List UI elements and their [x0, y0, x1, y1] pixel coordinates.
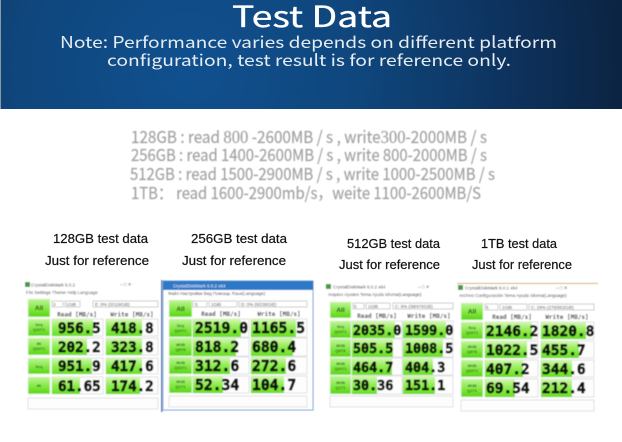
caption: 1TB	[472, 236, 572, 272]
speed specification list	[130, 124, 495, 204]
panel: 128GB benchmark window: E: 0% (0/119GiB)	[95, 302, 130, 307]
panel: 256GB benchmark window: Файл Настройки Вид Помощь Язык(Language)	[168, 290, 266, 296]
panel: 1TB benchmark window: C: 29% (275/953GiB)	[531, 305, 574, 310]
panel: 256GB benchmark window: 4KiB	[176, 360, 185, 365]
panel: 256GB benchmark window	[163, 281, 313, 410]
panel: 256GB benchmark window: 52.34	[195, 377, 239, 394]
panel: 128GB benchmark window: All	[35, 305, 43, 312]
panel: 128GB benchmark window: Write [MB/s]	[110, 312, 154, 318]
panel: 1TB benchmark window: Q8T8	[467, 349, 478, 354]
panel: 512GB benchmark window: 1599.0	[405, 324, 453, 339]
panel: 128GB benchmark window: Read [MB/s]	[57, 312, 97, 318]
panel: 128GB benchmark window: 4K	[36, 383, 42, 388]
panel: 128GB benchmark window: – □ ✕	[120, 282, 132, 287]
panel: 1TB benchmark window: 4KiB	[467, 383, 477, 388]
panel: 128GB benchmark window: 61.65	[58, 379, 101, 395]
panel: 128GB benchmark window: 1GiB	[66, 302, 76, 307]
panel: 1TB benchmark window: 455.7	[542, 343, 586, 359]
panel: 1TB benchmark window	[457, 283, 598, 412]
panel: 1TB benchmark window: 5	[486, 305, 489, 310]
panel: 1TB benchmark window: Q32T1	[466, 330, 479, 335]
panel: 512GB benchmark window: 30.36	[353, 379, 393, 394]
panel: 128GB benchmark window: 174.2	[111, 379, 154, 395]
panel: 128GB benchmark window: 323.8	[111, 340, 154, 356]
panel: 1TB benchmark window: Seq	[468, 325, 476, 330]
panel: 128GB benchmark window: CrystalDiskMark 5.0.2	[31, 282, 76, 288]
caption: 1TB: Just for reference	[472, 257, 572, 272]
panel: 128GB benchmark window: Seq	[35, 364, 43, 369]
panel: 256GB benchmark window: 312.6	[195, 358, 239, 375]
panel: 256GB benchmark window: Write [MB/s]	[257, 311, 301, 318]
panel: 512GB benchmark window: 2035.0	[353, 324, 401, 339]
panel: 512GB benchmark window: 1GiB	[368, 304, 378, 309]
panel: 256GB benchmark window: 818.2	[195, 339, 239, 356]
panel: 1TB benchmark window: 212.4	[542, 381, 586, 397]
caption: 128GB	[45, 231, 149, 268]
panel: 1TB benchmark window: 4KiB	[467, 344, 477, 349]
panel: 512GB benchmark window: Q32T1	[334, 366, 347, 371]
panel: 1TB benchmark window: Read [MB/s]	[492, 314, 532, 321]
caption: 1TB: 1TB test data	[481, 236, 558, 251]
panel: 256GB benchmark window: 272.6	[252, 358, 296, 375]
panel: 256GB benchmark window: Seq	[177, 323, 185, 328]
panel: 128GB benchmark window: 418.8	[111, 321, 154, 337]
panel: 512GB benchmark window: All	[336, 307, 345, 314]
panel: 1TB benchmark window: Write [MB/s]	[545, 314, 589, 321]
panel: 256GB benchmark window: 2519.0	[195, 320, 248, 337]
panel: 512GB benchmark window: Q8T8	[335, 348, 346, 353]
panel: 512GB benchmark window: 464.7	[353, 361, 393, 376]
panel: 256GB benchmark window: 1GiB	[211, 302, 221, 307]
panel: 512GB benchmark window: 505.5	[353, 342, 393, 357]
panel: 1TB benchmark window: 69.54	[486, 381, 530, 397]
speed specification list: 256GB : read 1400-2600MB / s , write 800-2000MB / s	[131, 142, 487, 166]
panel: 512GB benchmark window: CrystalDiskMark 6.0.2 x64	[333, 284, 386, 290]
caption: 512GB	[339, 236, 441, 272]
panel: 128GB benchmark window: Seq	[35, 322, 43, 327]
panel: 256GB benchmark window: D: 0% (0/238GiB)	[241, 302, 277, 307]
panel: 128GB benchmark window: Q32T1	[33, 346, 46, 351]
panel: 256GB benchmark window: All	[176, 306, 185, 313]
panel: 256GB benchmark window: 104.7	[252, 377, 296, 394]
panel: 1TB benchmark window: All	[468, 308, 476, 316]
panel: 512GB benchmark window: 1008.5	[405, 342, 453, 357]
caption: 128GB: 128GB test data	[53, 231, 149, 246]
panel: 256GB benchmark window: 5	[195, 302, 198, 307]
caption: 256GB	[182, 231, 288, 268]
panel: 1TB benchmark window: CrystalDiskMark 6.0.1 x64	[465, 286, 518, 290]
panel: 128GB benchmark window: 3	[53, 302, 56, 307]
panel: 256GB benchmark window: Q32T1	[174, 328, 187, 333]
panel: 512GB benchmark window: 404.3	[405, 361, 445, 376]
panel: 256GB benchmark window: 680.4	[252, 339, 296, 356]
caption: 512GB: 512GB test data	[347, 236, 441, 251]
panel: 512GB benchmark window: 5	[354, 304, 357, 309]
panel: 128GB benchmark window: Q32T1	[33, 327, 46, 332]
panel: 1TB benchmark window: 1820.8	[542, 324, 594, 340]
panel: 512GB benchmark window: 151.1	[405, 379, 445, 394]
panel: 256GB benchmark window: CrystalDiskMark 6.0.2 x64	[173, 284, 226, 288]
panel: 512GB benchmark window: Q32T1	[334, 329, 347, 334]
panel: 256GB benchmark window: Q8T8	[175, 347, 186, 352]
speed specification list: 512GB : read 1500-2900MB / s , write 1000-2500MB / s	[130, 161, 495, 185]
panel: 256GB benchmark window: Q1T1	[175, 384, 186, 389]
panel: 1TB benchmark window: 1022.5	[486, 343, 538, 359]
panel: 1TB benchmark window: Q32T1	[466, 368, 479, 373]
panel: 512GB benchmark window: Write [MB/s]	[407, 313, 451, 320]
panel: 512GB benchmark window: 4KiB	[336, 380, 345, 385]
panel: 128GB benchmark window: 417.6	[111, 359, 154, 375]
panel: 256GB benchmark window: 4KiB	[176, 342, 185, 347]
panel: 512GB benchmark window: 4KiB	[336, 343, 345, 348]
panel: 128GB benchmark window: 202.2	[58, 340, 101, 356]
caption: 512GB: Just for reference	[339, 257, 440, 272]
panel: 1TB benchmark window: Q1T1	[467, 388, 478, 393]
panel: 1TB benchmark window: 407.2	[486, 362, 530, 378]
panel: 256GB benchmark window: 1165.5	[252, 320, 305, 337]
panel: 512GB benchmark window: Seq	[337, 324, 345, 329]
panel: 1TB benchmark window: Archivo Configuración Tema Ayuda Idioma(Language)	[459, 293, 567, 298]
speed specification list: 1TB： read 1600-2900mb/s，weite 1100-2600MB/S	[131, 180, 481, 204]
panel: 512GB benchmark window: – □ ✕	[418, 284, 430, 290]
caption: 128GB: Just for reference	[45, 253, 149, 268]
caption: 256GB: Just for reference	[182, 253, 286, 268]
panel: 256GB benchmark window: 4KiB	[176, 379, 185, 384]
panel: 128GB benchmark window: 4K	[36, 341, 42, 346]
panel: 256GB benchmark window: Q32T1	[174, 365, 187, 370]
panel: 128GB benchmark window: File Settings Theme Help Language	[26, 290, 98, 295]
panel: 512GB benchmark window: Q1T1	[335, 385, 346, 390]
note text: Note: Performance varies depends on different platform	[60, 29, 557, 53]
panel: 512GB benchmark window: Read [MB/s]	[357, 313, 397, 320]
panel: 1TB benchmark window: – □ ✕	[556, 286, 568, 290]
panel: 1TB benchmark window: 4KiB	[467, 363, 477, 368]
panel: 128GB benchmark window: 956.5	[58, 321, 101, 337]
panel: 1TB benchmark window: 2146.2	[486, 324, 538, 340]
panel: 512GB benchmark window	[326, 283, 457, 410]
panel: 128GB benchmark window	[22, 280, 162, 412]
panel: 512GB benchmark window: Arquivo Ajustes Tema Ajuda Idioma(Language)	[328, 292, 422, 297]
panel: 1TB benchmark window: 344.6	[542, 362, 586, 378]
note text: configuration, test result is for reference only.	[107, 47, 511, 71]
panel: 256GB benchmark window: Read [MB/s]	[201, 311, 241, 318]
panel: 512GB benchmark window: 4KiB	[336, 361, 345, 366]
caption: 256GB: 256GB test data	[191, 231, 288, 246]
panel: 512GB benchmark window: C: 8% (39/476GiB)	[395, 304, 433, 309]
panel: 1TB benchmark window: 1GiB	[502, 305, 512, 310]
panel: 128GB benchmark window: 951.9	[58, 359, 101, 375]
note text	[60, 29, 557, 71]
header banner	[0, 0, 622, 109]
speed specification list: 128GB : read 800 -2600MB / s , write300-2000MB / s	[131, 124, 487, 148]
